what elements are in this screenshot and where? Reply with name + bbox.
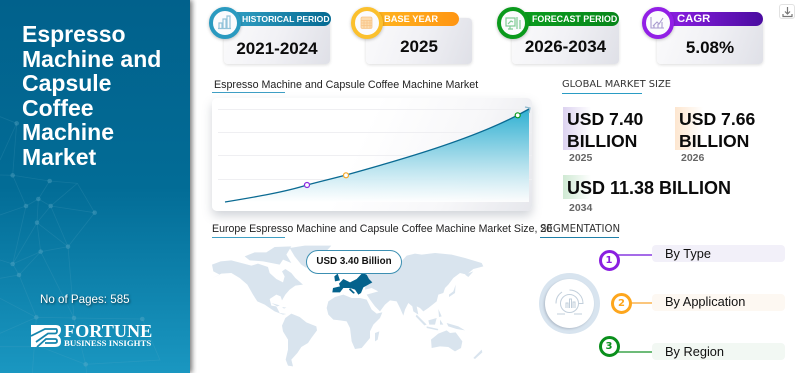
heading: Europe map: Europe Espresso Machine and Capsule Coffee Machine Market Size, 20 <box>212 223 552 235</box>
title: Machine <box>22 119 114 145</box>
map highlight: Europe <box>332 273 372 295</box>
stat: 2026 market size: USD 7.66 <box>679 109 755 129</box>
icon: growth chart <box>642 7 674 39</box>
card: historical period: HISTORICAL PERIOD <box>242 14 330 24</box>
stat: 2025 market size <box>563 107 643 164</box>
segment: by type <box>599 245 785 271</box>
chart: market growth curve <box>212 98 532 211</box>
segment: by region: By Region <box>665 344 724 359</box>
title: Capsule <box>22 70 111 96</box>
icon: FB mark <box>31 325 61 347</box>
card: CAGR: CAGR <box>677 13 710 25</box>
card: CAGR <box>640 6 764 66</box>
segment: by application <box>611 293 785 314</box>
logo: Fortune Business Insights <box>31 321 152 348</box>
card: base year: BASE YEAR <box>384 14 438 24</box>
logo wordmark: FORTUNE <box>64 321 152 341</box>
logo tagline: BUSINESS INSIGHTS <box>64 338 151 348</box>
stat: 2026 market size: 2026 <box>681 152 704 164</box>
chart: world map <box>212 246 484 366</box>
title: Market <box>22 144 96 170</box>
icon: segmentation hub <box>539 273 600 334</box>
segment: by type: By Type <box>665 246 711 261</box>
card: CAGR: 5.08% <box>686 38 734 57</box>
callout: Europe value <box>306 250 402 274</box>
stat: 2026 market size <box>675 107 755 164</box>
segment: by region: 3 <box>606 341 612 352</box>
stat: 2025 market size: USD 7.40 <box>567 109 643 129</box>
card: forecast period <box>496 6 620 66</box>
stat: 2034 market size: USD 11.38 BILLION <box>567 178 731 198</box>
stat: 2026 market size: BILLION <box>679 131 749 151</box>
title: Coffee <box>22 94 94 120</box>
card: base year <box>350 6 473 66</box>
card: historical period <box>208 6 331 66</box>
card: historical period: 2021-2024 <box>236 39 318 58</box>
icon: bar chart <box>209 7 241 39</box>
segment: by application: By Application <box>665 294 745 309</box>
panel: left sidebar <box>0 0 190 373</box>
heading: global market size: GLOBAL MARKET SIZE <box>562 79 671 90</box>
segment: by type: 1 <box>606 254 612 266</box>
icon: calendar <box>351 7 383 39</box>
stat: 2025 market size: 2025 <box>569 152 592 164</box>
segment: by region <box>599 336 785 360</box>
page count: No of Pages: 585 <box>40 293 130 306</box>
stat: 2034 market size: 2034 <box>569 202 592 214</box>
stat: 2034 market size <box>563 175 731 214</box>
stat: 2025 market size: BILLION <box>567 131 637 151</box>
title: Machine and <box>22 46 161 72</box>
segment: by application: 2 <box>618 298 625 309</box>
heading: segmentation: SEGMENTATION <box>540 224 620 235</box>
icon: download button <box>779 4 795 19</box>
card: forecast period: 2026-2034 <box>525 37 606 56</box>
heading: market chart: Espresso Machine and Capsule Coffee Machine Market <box>214 79 478 91</box>
card: base year: 2025 <box>400 37 438 56</box>
icon: forecast screen <box>497 7 529 39</box>
card: forecast period: FORECAST PERIOD <box>532 14 617 24</box>
title: Espresso <box>22 21 126 47</box>
title <box>22 21 161 170</box>
callout: Europe value: USD 3.40 Billion <box>316 256 392 267</box>
